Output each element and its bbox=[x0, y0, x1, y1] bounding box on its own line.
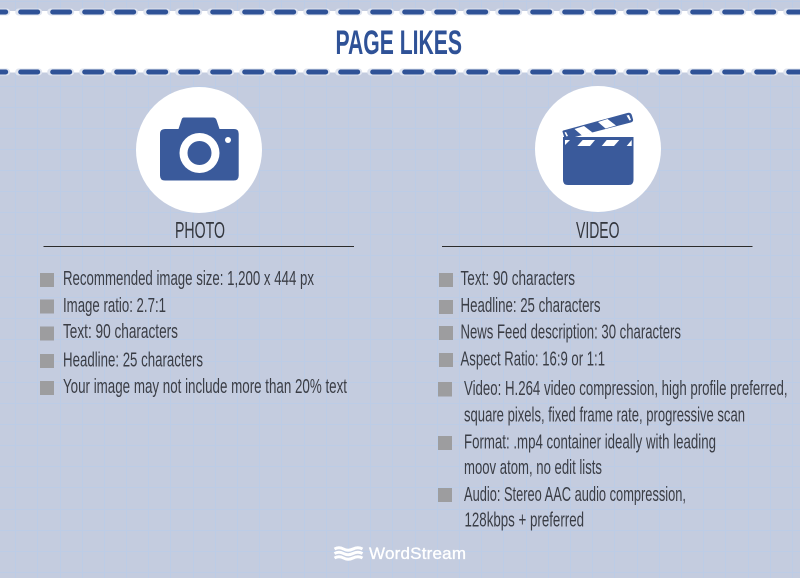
photo spec list: Your image may not include more than 20% text bbox=[63, 375, 347, 398]
video spec list: Headline: 25 characters bbox=[460, 294, 600, 317]
photo spec list: Image ratio: 2.7:1 bbox=[63, 294, 166, 317]
photo spec list: Headline: 25 characters bbox=[63, 348, 203, 372]
panel: photo bbox=[40, 87, 354, 398]
title: PAGE LIKES bbox=[336, 24, 462, 62]
photo spec list: Recommended image size: 1,200 x 444 px bbox=[63, 267, 314, 290]
panel: video bbox=[438, 86, 788, 532]
video spec list: News Feed description: 30 characters bbox=[460, 320, 681, 344]
video spec list: Aspect Ratio: 16:9 or 1:1 bbox=[460, 348, 605, 370]
video spec list: 128kbps + preferred bbox=[464, 508, 584, 532]
photo spec list bbox=[40, 267, 347, 398]
video spec list bbox=[438, 267, 788, 532]
icon: camera bbox=[136, 87, 262, 213]
heading: photo: PHOTO bbox=[175, 217, 225, 243]
photo spec list: Text: 90 characters bbox=[63, 320, 178, 343]
video spec list: moov atom, no edit lists bbox=[464, 456, 602, 479]
icon: clapperboard bbox=[535, 86, 661, 212]
heading: video: VIDEO bbox=[576, 217, 620, 243]
title band bbox=[0, 11, 800, 72]
logo: WordStream: WordStream bbox=[369, 544, 466, 563]
video spec list: Text: 90 characters bbox=[460, 267, 575, 290]
